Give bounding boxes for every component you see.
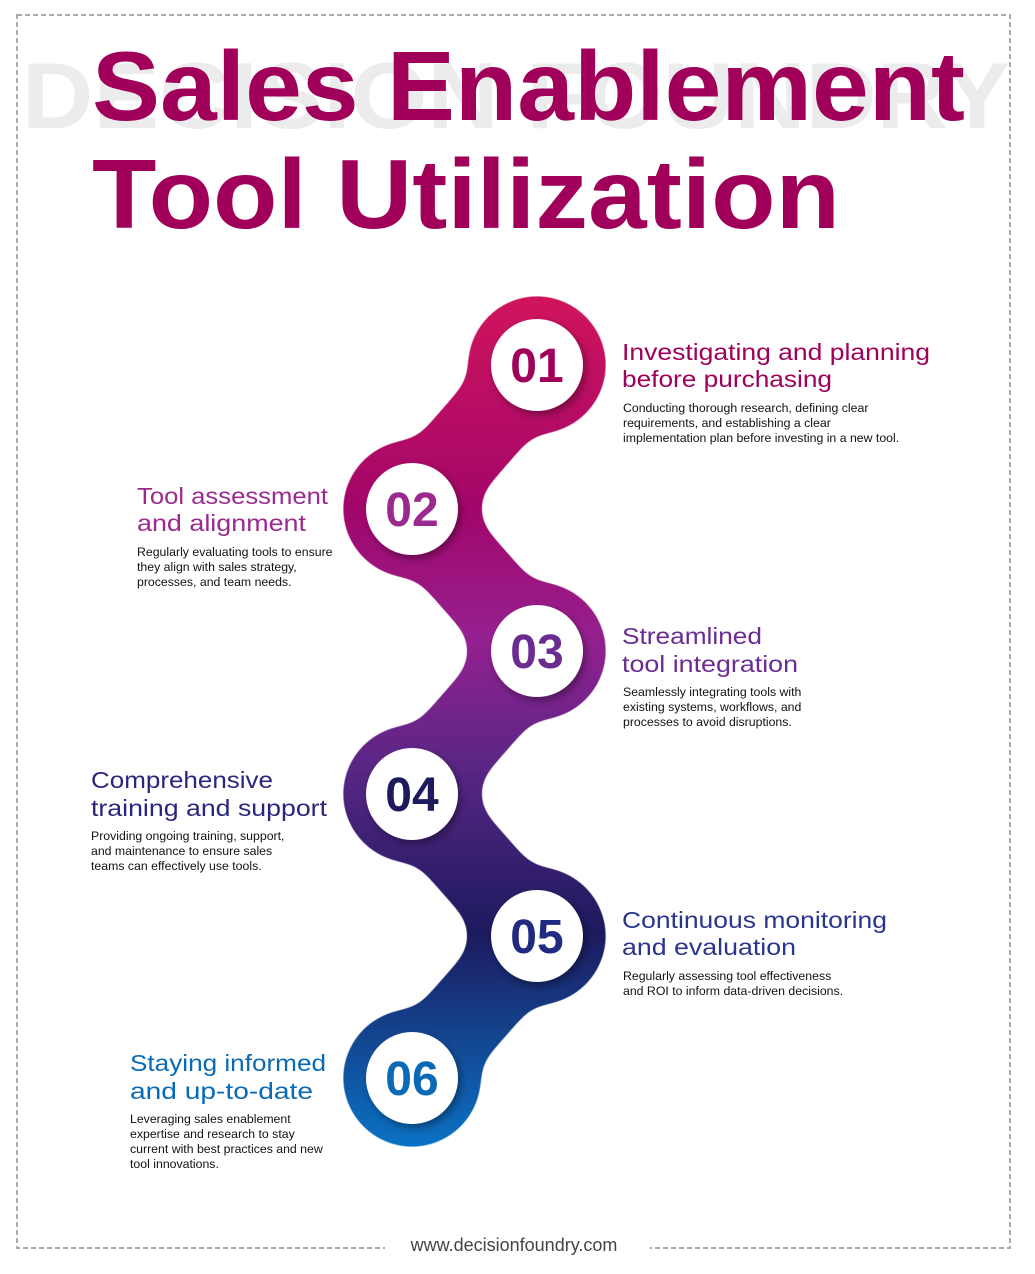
step 4 text: teams can effectively use tools. bbox=[91, 859, 262, 873]
step 1 text: before purchasing bbox=[622, 366, 832, 392]
step 4 text bbox=[91, 767, 328, 873]
step 2 text bbox=[137, 483, 333, 589]
step 2 text: Tool assessment bbox=[137, 483, 329, 509]
watermark: DECISION FOUNDRY bbox=[22, 43, 1010, 148]
number circles bbox=[366, 319, 583, 1124]
snake path bbox=[343, 296, 606, 1147]
step 5 text bbox=[622, 907, 887, 998]
number circles: 06 bbox=[385, 1053, 439, 1106]
step 6 text: Leveraging sales enablement bbox=[130, 1112, 291, 1126]
number circles: 01 bbox=[510, 340, 564, 393]
step 5 text: Regularly assessing tool effectiveness bbox=[623, 969, 831, 983]
step 1 text: Investigating and planning bbox=[622, 339, 930, 365]
title: Tool Utilization bbox=[92, 139, 840, 249]
step 3 text: tool integration bbox=[622, 651, 798, 677]
step 2 text: processes, and team needs. bbox=[137, 575, 292, 589]
title bbox=[92, 31, 965, 249]
step 3 text: processes to avoid disruptions. bbox=[623, 715, 792, 729]
step 3 text: Streamlined bbox=[622, 623, 762, 649]
number circles: 04 bbox=[385, 769, 439, 822]
step 6 text bbox=[130, 1050, 326, 1171]
title: Sales Enablement bbox=[92, 31, 965, 141]
step 1 text: implementation plan before investing in a new tool. bbox=[623, 431, 899, 445]
step 5 text: Continuous monitoring bbox=[622, 907, 887, 933]
step 4 text: Comprehensive bbox=[91, 767, 273, 793]
step 6 text: expertise and research to stay bbox=[130, 1127, 296, 1141]
step 2 text: and alignment bbox=[137, 510, 307, 536]
step 6 text: Staying informed bbox=[130, 1050, 326, 1076]
step 2 text: they align with sales strategy, bbox=[137, 560, 297, 574]
step 2 text: Regularly evaluating tools to ensure bbox=[137, 545, 333, 559]
step 4 text: and maintenance to ensure sales bbox=[91, 844, 272, 858]
step 1 text: requirements, and establishing a clear bbox=[623, 416, 831, 430]
step 6 text: and up-to-date bbox=[130, 1078, 313, 1104]
step 1 text bbox=[622, 339, 930, 445]
step 4 text: training and support bbox=[91, 795, 328, 821]
step 4 text: Providing ongoing training, support, bbox=[91, 829, 284, 843]
step 6 text: current with best practices and new bbox=[130, 1142, 323, 1156]
step 3 text bbox=[622, 623, 802, 729]
number circles: 03 bbox=[510, 626, 564, 679]
step 6 text: tool innovations. bbox=[130, 1157, 219, 1171]
step 1 text: Conducting thorough research, defining clear bbox=[623, 401, 868, 415]
number circles: 02 bbox=[385, 484, 439, 537]
step 3 text: existing systems, workflows, and bbox=[623, 700, 802, 714]
step 5 text: and evaluation bbox=[622, 934, 796, 960]
step 3 text: Seamlessly integrating tools with bbox=[623, 685, 802, 699]
step 5 text: and ROI to inform data-driven decisions. bbox=[623, 984, 843, 998]
footer url: www.decisionfoundry.com bbox=[410, 1235, 617, 1255]
number circles: 05 bbox=[510, 911, 564, 964]
